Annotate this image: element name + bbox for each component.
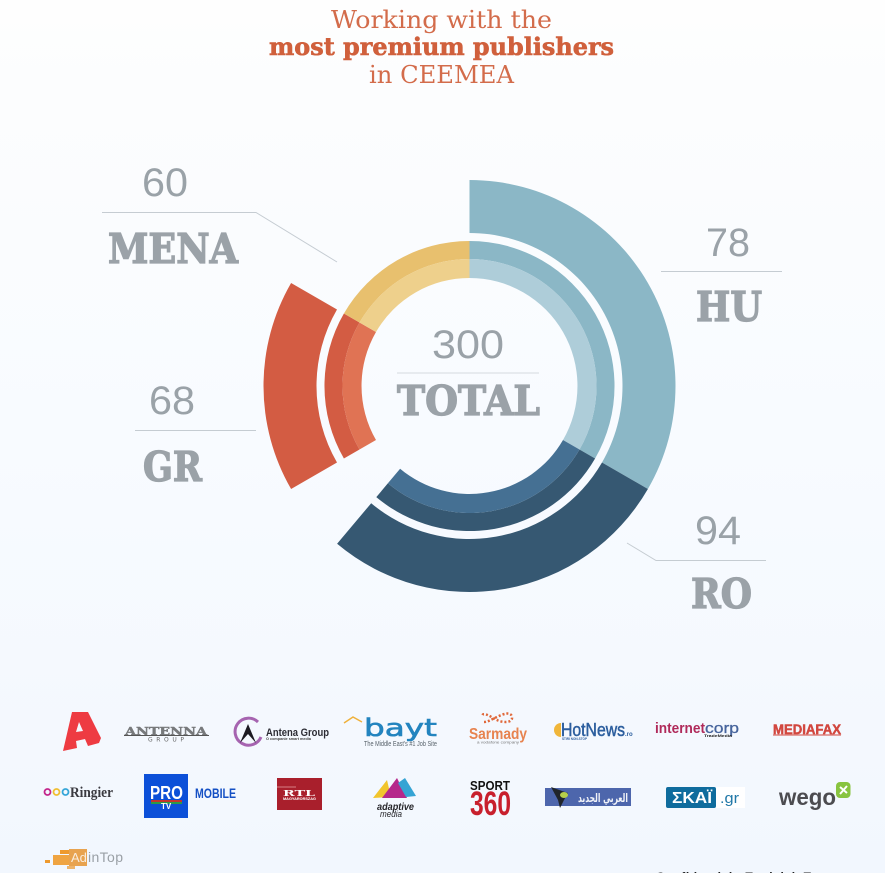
logo: Sport 360: SPORT — [470, 778, 510, 793]
logo: Ringier — [44, 785, 113, 801]
label: MENA — [102, 161, 337, 273]
donut chart — [264, 180, 675, 592]
logo: Ringier: Ringier — [70, 785, 113, 801]
logo: Sarmady — [469, 714, 527, 744]
logo: Adaptive Media — [373, 778, 416, 819]
logo: Antenna Group — [124, 725, 209, 744]
logo: Antenna Group: ANTENNA — [124, 725, 208, 738]
logo: Al Araby — [545, 787, 631, 808]
logo: Antena Group: O companie smart media — [266, 736, 312, 741]
logo: Bayt: bayt — [364, 714, 437, 742]
label: GR: GR — [143, 443, 203, 491]
logo: Bayt: The Middle East's #1 Job Site — [364, 741, 437, 748]
logo: Sport 360: 360 — [470, 785, 511, 823]
logo: RTL: MAGYARORSZAG — [283, 797, 316, 801]
logo: InternetCorp: corp — [705, 720, 739, 737]
label: RO — [627, 509, 766, 618]
logo: HotNews: HotNews — [561, 720, 625, 740]
logo: Skai: ΣΚΑΪ — [672, 789, 713, 807]
logo: Wego: wego — [778, 784, 836, 810]
logo: Mediafax: MEDIAFAX — [773, 721, 842, 737]
logo: Skai: .gr — [720, 790, 739, 807]
logo: Sarmady: Sarmady — [469, 726, 527, 743]
logo: Pro TV Mobile: TV — [161, 802, 172, 811]
logo: Pro TV Mobile — [144, 774, 236, 818]
logo: Al Araby: العربي الجديد — [578, 791, 628, 805]
segment: RO — [337, 440, 648, 592]
logo: Alpha — [63, 712, 101, 751]
label: HU — [661, 221, 782, 331]
logo: HotNews: STIRI NON-STOP — [562, 736, 587, 741]
label: MENA: MENA — [108, 225, 239, 273]
label: HU: HU — [696, 283, 762, 331]
logo: InternetCorp — [655, 720, 739, 738]
segment: MENA — [344, 241, 470, 332]
label: total: TOTAL — [397, 377, 540, 425]
logo: Skai — [666, 787, 745, 808]
segment: HU — [470, 180, 675, 489]
logo: Antena Group: Antena Group — [266, 727, 329, 739]
label: MENA: 60 — [142, 161, 188, 205]
logo: RTL: RTL — [283, 788, 316, 798]
label: HU: 78 — [706, 221, 750, 265]
logo: Bayt — [344, 714, 437, 748]
logo: InternetCorp: internet — [655, 720, 705, 737]
logo: Antenna Group: GROUP — [148, 736, 184, 744]
logo: Sport 360 — [470, 778, 511, 823]
logo: Adaptive Media: adaptive — [377, 802, 414, 813]
label: GR — [135, 379, 256, 491]
logo: AdInTop: Ad — [71, 850, 87, 865]
label: total — [397, 323, 540, 425]
logo: Pro TV Mobile: PRO — [150, 783, 183, 803]
logo: Adaptive Media: media — [380, 809, 402, 819]
logo: AdInTop — [45, 849, 123, 869]
logo: Antena Group — [235, 718, 329, 745]
logo: HotNews: .ro — [625, 732, 633, 738]
logo: Pro TV Mobile: MOBILE — [195, 786, 236, 801]
title: Working with the — [331, 6, 552, 34]
title: most premium publishers — [269, 32, 614, 61]
logo: Sarmady: a vodafone company — [477, 740, 519, 744]
label: total: 300 — [432, 323, 504, 367]
logo: InternetCorp: TradeMedia — [704, 733, 733, 738]
label: GR: 68 — [149, 379, 195, 423]
logo: RTL — [277, 778, 322, 810]
title — [269, 6, 614, 89]
segment: GR — [264, 283, 376, 489]
label: RO: 94 — [695, 509, 741, 553]
title: in CEEMEA — [369, 61, 515, 89]
label: RO: RO — [691, 570, 752, 618]
logo: AdInTop: inTop — [88, 849, 123, 865]
